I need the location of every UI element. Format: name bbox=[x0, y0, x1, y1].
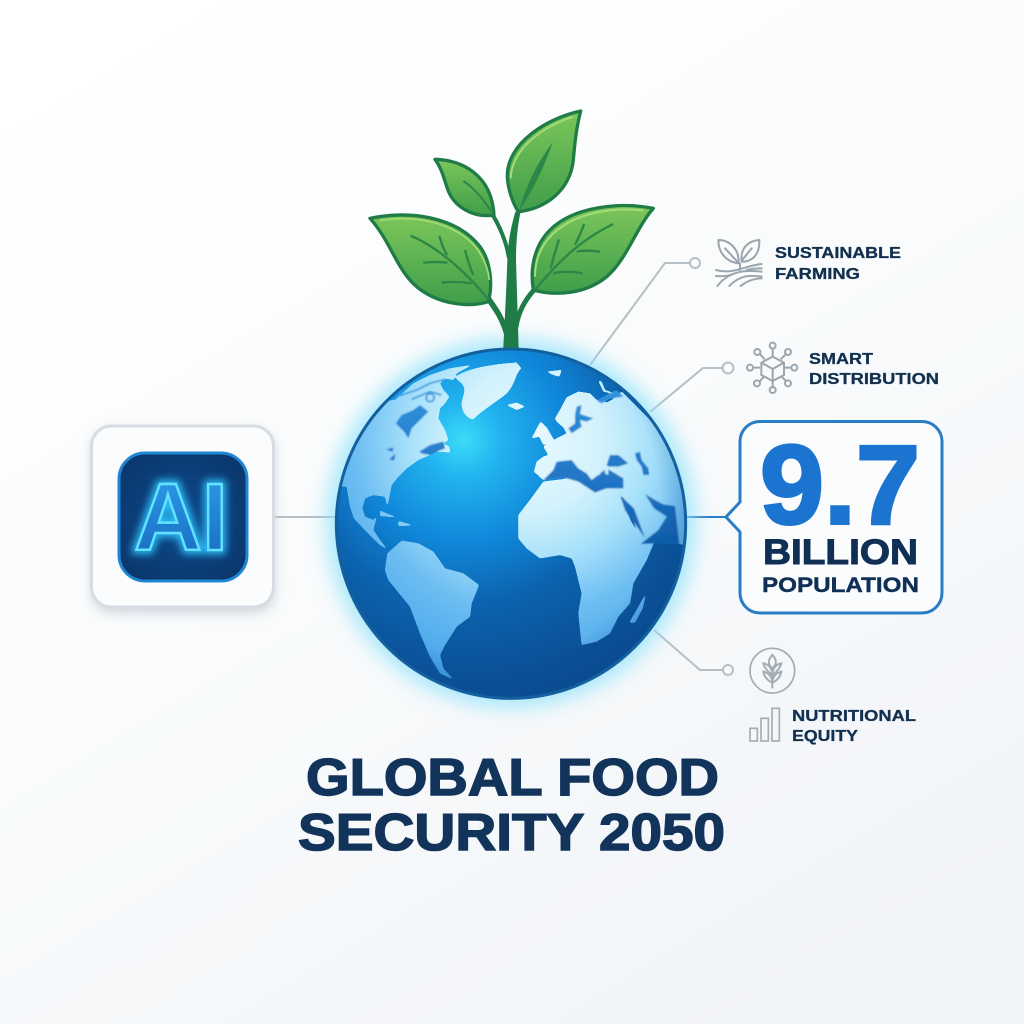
ocean bbox=[336, 349, 686, 698]
Italy and Greece bbox=[597, 468, 610, 476]
connector: smart distribution bbox=[650, 362, 734, 412]
billion: BILLION bbox=[763, 533, 918, 572]
plant sprout bbox=[370, 111, 653, 348]
icon: smart distribution bbox=[747, 343, 797, 393]
population: POPULATION bbox=[762, 574, 919, 597]
AI glow: AI bbox=[134, 464, 228, 571]
leaf: top bbox=[507, 111, 581, 212]
seas and bays bbox=[386, 390, 623, 461]
leaf: big left bbox=[370, 215, 491, 305]
connector: sustainable farming bbox=[590, 258, 700, 365]
card bbox=[92, 426, 274, 607]
population callout bbox=[726, 422, 942, 613]
title: GLOBAL FOOD bbox=[306, 749, 719, 807]
leaf: small left bbox=[435, 159, 494, 216]
label: sustainable farming: SUSTAINABLE bbox=[775, 245, 901, 262]
leaf: big right bbox=[532, 206, 653, 293]
arctic channels bbox=[398, 379, 445, 402]
label: nutritional equity: EQUITY bbox=[792, 728, 858, 745]
label: sustainable farming bbox=[775, 245, 901, 283]
title: SECURITY 2050 bbox=[298, 804, 725, 862]
title bbox=[298, 749, 725, 862]
AI tile bbox=[119, 453, 247, 581]
globe glow bbox=[327, 339, 695, 707]
connector: population callout bbox=[686, 516, 727, 518]
continent: South America bbox=[385, 541, 479, 679]
islands bbox=[380, 370, 646, 623]
label: nutritional equity bbox=[792, 708, 916, 745]
AI card bbox=[92, 426, 274, 612]
AI label: AI bbox=[134, 464, 228, 571]
connector: nutritional equity bbox=[654, 630, 733, 675]
continent: Greenland bbox=[455, 363, 521, 419]
globe bbox=[330, 349, 693, 698]
continent: North America bbox=[330, 365, 472, 549]
label: sustainable farming: FARMING bbox=[775, 266, 860, 283]
label: smart distribution bbox=[809, 351, 939, 388]
label: smart distribution: DISTRIBUTION bbox=[809, 371, 939, 388]
continent: Africa bbox=[518, 478, 655, 645]
stems bbox=[489, 212, 534, 348]
9.7 number: 9.7 bbox=[760, 422, 920, 548]
icon: bar chart bbox=[750, 708, 779, 741]
label: smart distribution: SMART bbox=[809, 351, 873, 368]
icon: wheat badge bbox=[750, 648, 795, 693]
continent: Eurasia bbox=[534, 392, 693, 547]
icon: sustainable farming bbox=[716, 240, 762, 286]
connector: AI to globe bbox=[274, 516, 336, 518]
label: nutritional equity: NUTRITIONAL bbox=[792, 708, 916, 725]
globe shading and rim bbox=[336, 349, 686, 698]
card shadow bbox=[92, 430, 274, 612]
callout box bbox=[726, 422, 942, 613]
